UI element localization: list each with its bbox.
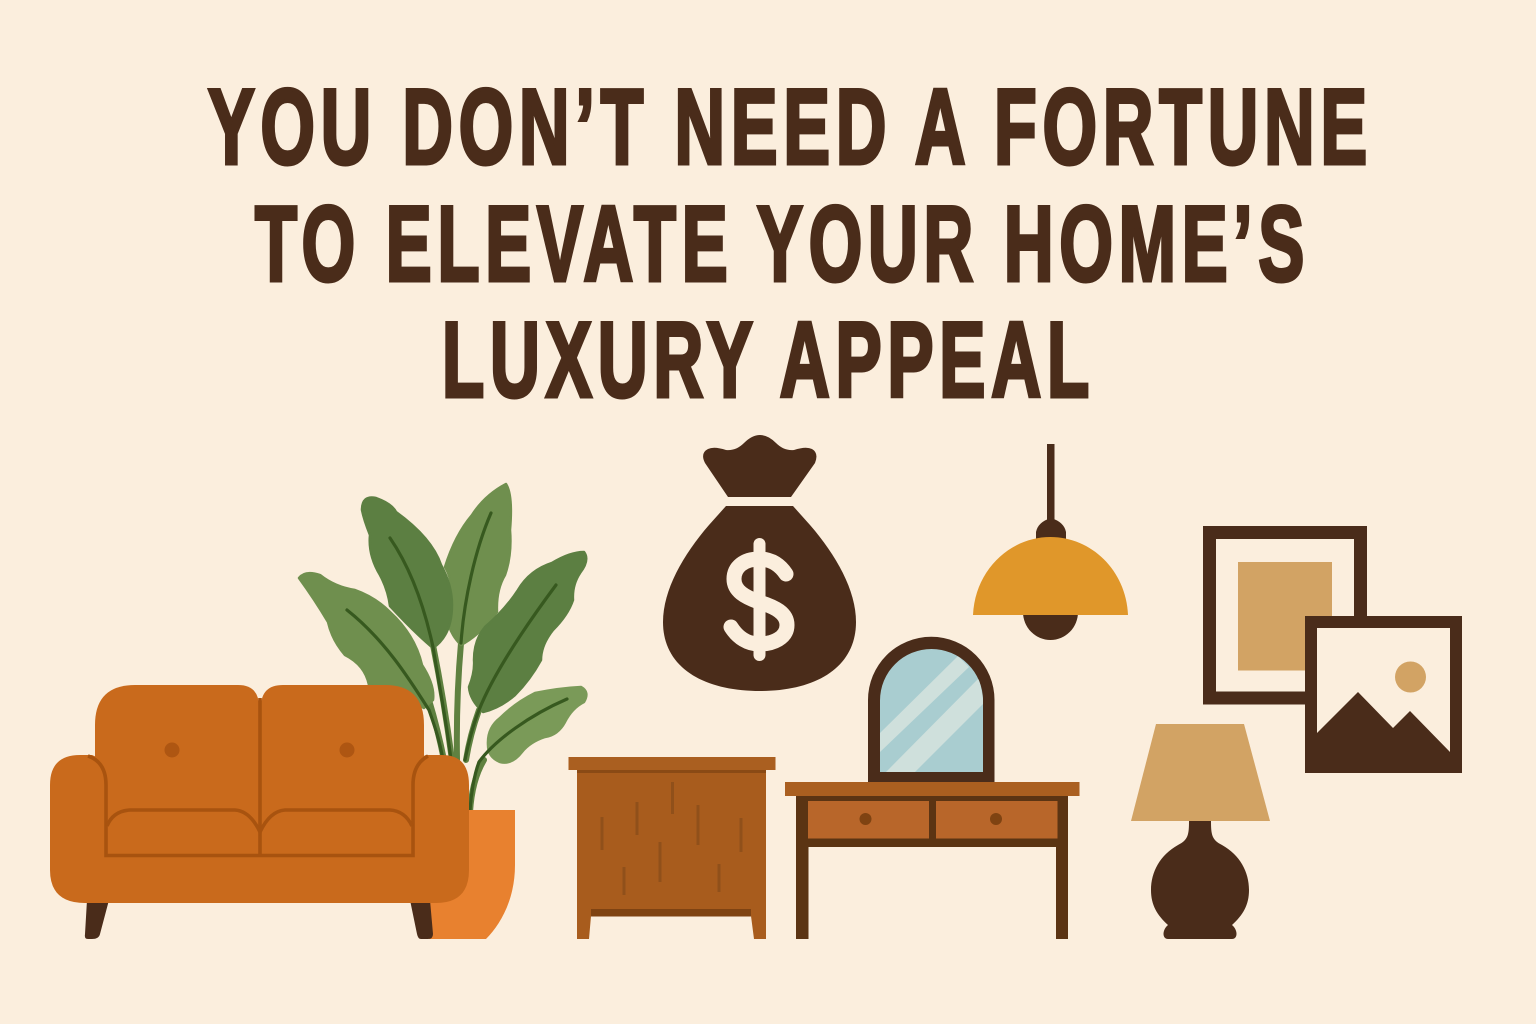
nightstand top shadow bbox=[577, 769, 766, 773]
icon: framed landscape picture bbox=[1311, 622, 1456, 770]
icon: vanity table bbox=[785, 782, 1080, 939]
frame border bbox=[1210, 532, 1360, 698]
picture border bbox=[1311, 622, 1456, 767]
sofa body and arms bbox=[50, 755, 469, 903]
icon: nightstand bbox=[568, 757, 776, 939]
frame art bbox=[1238, 562, 1332, 670]
icon: vanity mirror bbox=[868, 637, 994, 782]
icon: table lamp bbox=[1131, 724, 1270, 939]
sofa legs bbox=[85, 900, 433, 939]
title bbox=[208, 66, 1373, 420]
icon: sofa bbox=[50, 685, 469, 939]
title line 3: LUXURY APPEAL bbox=[442, 300, 1095, 420]
table frame bbox=[796, 796, 1068, 939]
picture mountains bbox=[1317, 692, 1450, 770]
sofa buttons bbox=[164, 742, 354, 758]
mirror frame bbox=[868, 637, 994, 782]
icon: money bag bbox=[663, 435, 856, 691]
money bag knot bbox=[703, 435, 816, 497]
icon: potted plant bbox=[299, 484, 586, 939]
nightstand top bbox=[568, 757, 776, 770]
plant stems bbox=[429, 643, 484, 812]
leaf: left bbox=[299, 573, 433, 708]
icon: framed art square bbox=[1210, 532, 1360, 698]
left drawer bbox=[808, 801, 929, 838]
dollar sign bbox=[731, 544, 787, 655]
drawer knobs bbox=[860, 813, 1002, 825]
lamp cap bbox=[1036, 518, 1066, 540]
seat fill bbox=[107, 790, 412, 860]
sofa seam lines bbox=[88, 698, 428, 856]
wood grain bbox=[602, 782, 741, 895]
lamp bulb bbox=[1023, 612, 1078, 640]
right back cushion bbox=[261, 685, 424, 800]
table top bbox=[785, 782, 1080, 796]
nightstand body bbox=[577, 770, 766, 939]
leaf: top right bbox=[445, 484, 511, 645]
leaf: top left bbox=[362, 498, 452, 648]
left back cushion bbox=[95, 685, 259, 800]
lamp base bbox=[1151, 821, 1249, 939]
icon: pendant lamp bbox=[973, 444, 1128, 640]
leaf: right bbox=[469, 552, 586, 712]
leaf: lower right bbox=[488, 687, 586, 763]
money bag body bbox=[663, 506, 856, 691]
lamp shade bbox=[1131, 724, 1270, 821]
plant pot bbox=[420, 810, 515, 939]
picture sun bbox=[1395, 662, 1426, 692]
lamp cord bbox=[1047, 444, 1054, 524]
mirror glass bbox=[880, 649, 983, 772]
mirror reflections bbox=[880, 656, 984, 772]
lamp shade bbox=[973, 537, 1128, 615]
nightstand base shadow bbox=[591, 909, 751, 916]
leaf veins bbox=[347, 513, 567, 810]
right drawer bbox=[936, 801, 1058, 838]
